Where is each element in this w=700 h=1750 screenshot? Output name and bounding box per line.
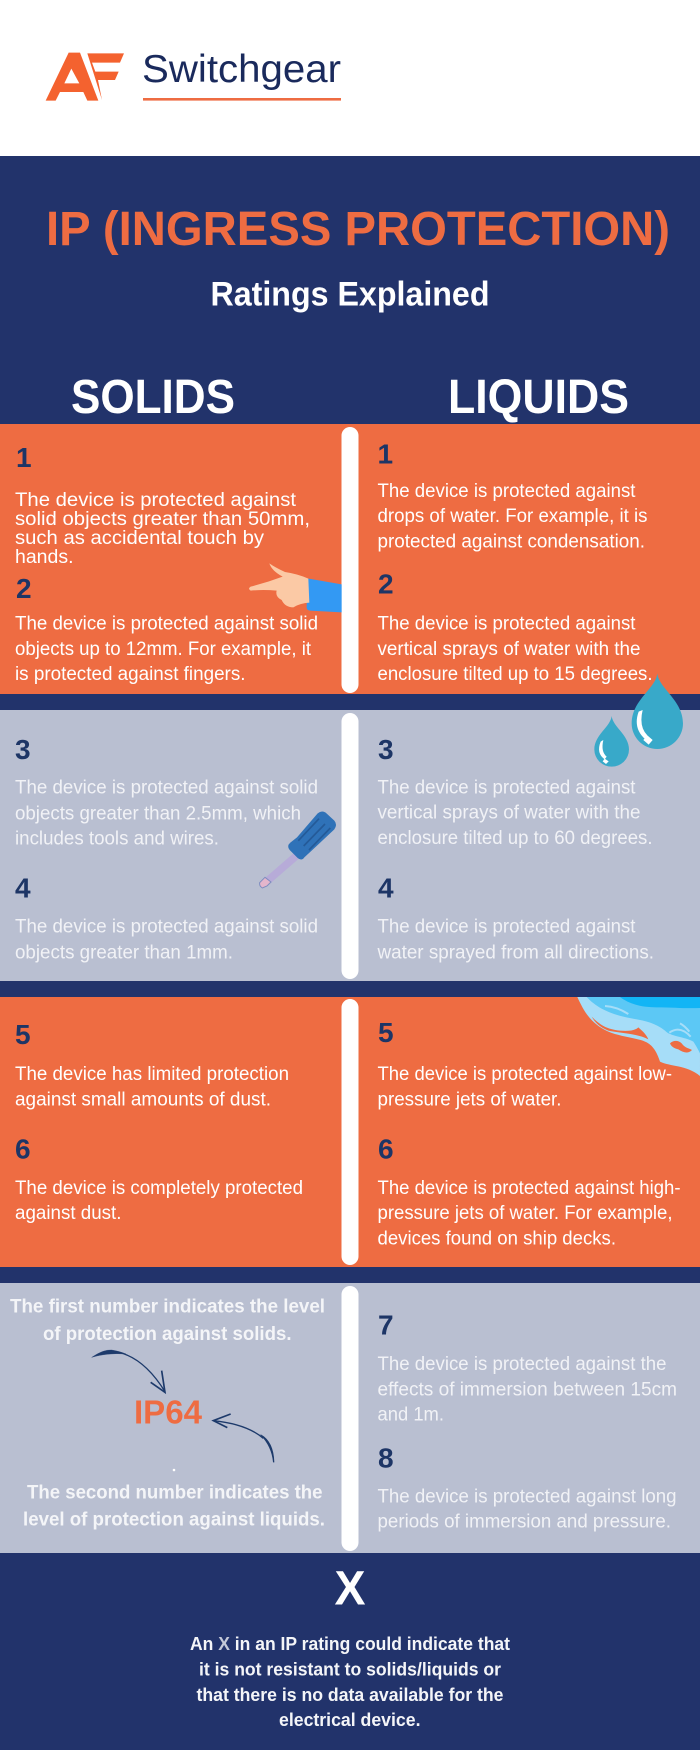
icon: AF mark xyxy=(46,53,124,101)
liquids 5: 5 xyxy=(378,1017,394,1048)
divider pill xyxy=(342,713,358,979)
liquids 3: 3 xyxy=(378,734,394,765)
solids 6: The device is completely protected xyxy=(15,1178,303,1199)
liquids 2: 2 xyxy=(378,568,394,600)
solids 4: objects greater than 1mm. xyxy=(15,942,233,964)
solids 2: 2 xyxy=(16,573,32,604)
solids 1: 1 xyxy=(16,442,32,473)
IP64 example: IP64 xyxy=(134,1394,203,1430)
liquids 4 xyxy=(377,872,654,964)
subtitle: Ratings Explained xyxy=(210,276,490,314)
liquids 5: pressure jets of water. xyxy=(378,1090,562,1110)
liquids 4: 4 xyxy=(378,872,394,904)
liquids 8 xyxy=(378,1442,676,1532)
icon: water wave xyxy=(577,997,700,1076)
panel: ratings 5 and 6 xyxy=(0,997,700,1267)
solids 4 xyxy=(15,872,318,964)
icon: water drops xyxy=(594,673,683,767)
large drop xyxy=(632,673,683,749)
liquids 6: devices found on ship decks. xyxy=(378,1228,616,1250)
liquids 6 xyxy=(378,1134,680,1250)
divider pill xyxy=(342,427,358,693)
solids 5 xyxy=(15,1019,289,1110)
solids 6: against dust. xyxy=(15,1203,122,1224)
arrow: second number xyxy=(213,1414,274,1462)
solids 4: The device is protected against solid xyxy=(15,916,318,938)
small drop xyxy=(594,716,629,767)
arrow: first number xyxy=(92,1350,165,1392)
solids 1: hands. xyxy=(15,547,74,568)
liquids 2 xyxy=(378,568,652,685)
liquids 6: The device is protected against high- xyxy=(378,1178,680,1199)
liquids 3 xyxy=(378,734,652,849)
title: IP (INGRESS PROTECTION) xyxy=(46,203,670,256)
logo wordmark: Switchgear xyxy=(142,48,341,91)
liquids 6: 6 xyxy=(378,1134,394,1164)
small dot xyxy=(173,1469,175,1471)
note: first number: The first number indicates the level xyxy=(10,1296,325,1318)
liquids 6: pressure jets of water. For example, xyxy=(378,1203,672,1224)
divider pill xyxy=(342,1286,358,1551)
solids 2 xyxy=(15,573,318,685)
footer explanation: that there is no data available for the xyxy=(196,1684,504,1705)
liquids 7: effects of immersion between 15cm xyxy=(378,1380,677,1400)
divider pill xyxy=(342,999,358,1265)
liquids 4: water sprayed from all directions. xyxy=(377,942,654,964)
liquids 3: The device is protected against xyxy=(378,778,636,798)
panel: ratings 1 and 2 xyxy=(0,424,700,694)
liquids 3: enclosure tilted up to 60 degrees. xyxy=(378,828,652,849)
liquids 3: vertical sprays of water with the xyxy=(378,802,640,824)
liquids 4: The device is protected against xyxy=(378,916,636,938)
note: first number: of protection against solids. xyxy=(43,1323,292,1345)
solids 1 xyxy=(15,442,310,568)
liquids 2: enclosure tilted up to 15 degrees. xyxy=(378,664,652,685)
solids 1: The device is protected against xyxy=(15,490,297,511)
footer explanation: An X in an IP rating could indicate that xyxy=(190,1633,510,1654)
note: second number: The second number indicates the xyxy=(27,1482,323,1504)
liquids 5 xyxy=(378,1017,672,1110)
solids 6: 6 xyxy=(15,1134,31,1164)
heading: liquids: LIQUIDS xyxy=(448,371,629,424)
logo underline xyxy=(143,98,341,101)
liquids 1: 1 xyxy=(378,438,393,470)
liquids 2: The device is protected against xyxy=(378,614,636,634)
panel: reading an IP code and ratings 7 and 8 xyxy=(0,1283,700,1553)
liquids 8: 8 xyxy=(378,1442,394,1474)
liquids 8: periods of immersion and pressure. xyxy=(378,1512,671,1532)
liquids 5: The device is protected against low- xyxy=(378,1064,672,1085)
solids 1: such as accidental touch by xyxy=(15,528,265,549)
solids 5: against small amounts of dust. xyxy=(15,1090,271,1110)
solids 3: The device is protected against solid xyxy=(15,778,318,798)
heading: solids: SOLIDS xyxy=(71,371,235,424)
solids 3 xyxy=(15,734,318,850)
liquids 1 xyxy=(378,438,648,552)
solids 3: 3 xyxy=(15,734,31,765)
footer explanation: electrical device. xyxy=(279,1709,420,1730)
liquids 7: 7 xyxy=(378,1310,394,1340)
note: first number xyxy=(10,1296,325,1345)
solids 1: solid objects greater than 50mm, xyxy=(15,509,310,530)
solids 2: objects up to 12mm. For example, it xyxy=(15,639,312,660)
footer explanation: it is not resistant to solids/liquids or xyxy=(199,1658,501,1680)
solids 3: includes tools and wires. xyxy=(15,828,219,850)
note: second number xyxy=(23,1482,325,1530)
solids 6 xyxy=(15,1134,303,1224)
liquids 7: and 1m. xyxy=(378,1404,444,1426)
icon: pointing hand xyxy=(249,563,342,612)
liquids 1: drops of water. For example, it is xyxy=(378,506,648,527)
solids 3: objects greater than 2.5mm, which xyxy=(15,804,301,824)
solids 2: is protected against fingers. xyxy=(15,664,246,685)
liquids 1: protected against condensation. xyxy=(378,532,645,552)
footer explanation xyxy=(190,1633,510,1730)
liquids 7 xyxy=(378,1310,677,1426)
panel: ratings 3 and 4 xyxy=(0,710,700,981)
liquids 7: The device is protected against the xyxy=(378,1354,666,1375)
logo: AF Switchgear xyxy=(46,48,341,101)
solids 4: 4 xyxy=(15,872,31,904)
solids 5: 5 xyxy=(15,1019,31,1050)
liquids 2: vertical sprays of water with the xyxy=(378,639,640,660)
liquids 1: The device is protected against xyxy=(378,481,636,502)
footer X heading: X xyxy=(334,1562,366,1616)
note: second number: level of protection against liquids. xyxy=(23,1508,325,1530)
icon: screwdriver xyxy=(260,811,336,888)
solids 5: The device has limited protection xyxy=(15,1064,289,1085)
solids 2: The device is protected against solid xyxy=(15,614,318,634)
liquids 8: The device is protected against long xyxy=(378,1486,676,1508)
